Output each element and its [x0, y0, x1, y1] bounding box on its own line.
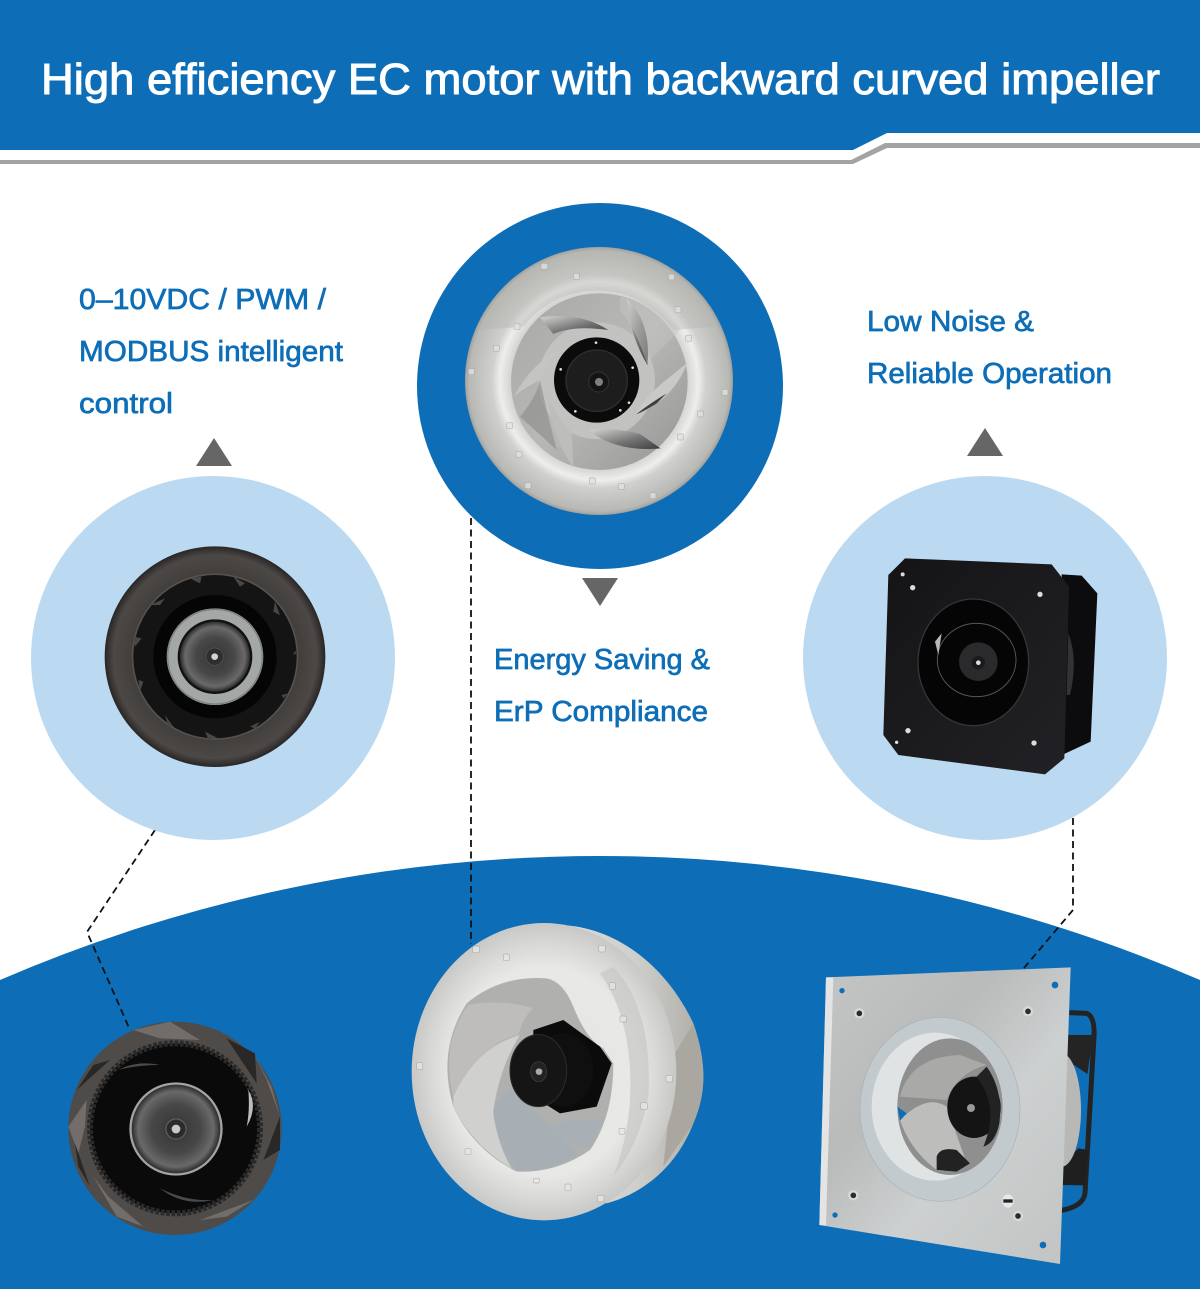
header band: [0, 0, 1200, 150]
text: energy saving: ErP Compliance: [494, 696, 708, 728]
icon: silver impeller front view: [465, 247, 733, 515]
text: low noise: [867, 306, 1112, 390]
motor hub: [129, 1082, 223, 1176]
product: black impeller, bottom left: [68, 1022, 282, 1235]
icon: dark impeller, intake side: [105, 546, 325, 767]
text: control modes: MODBUS intelligent: [79, 336, 343, 368]
light blue circle: [31, 476, 395, 840]
bottom blue arc panel: [0, 856, 1200, 1289]
panel: intelligent control, left fan: [31, 284, 395, 840]
light blue circle: [803, 476, 1167, 840]
text: low noise: Low Noise &: [867, 306, 1034, 338]
outer blade rim: [68, 1022, 282, 1235]
panel: low noise, right fan: [803, 306, 1167, 840]
header grey rule: [0, 143, 1200, 164]
front shroud: [412, 923, 676, 1220]
text: energy saving: Energy Saving &: [494, 644, 710, 676]
centre blue circle: [417, 203, 783, 569]
product: silver square-plate fan, bottom right: [819, 967, 1094, 1264]
rear frame and handle: [1060, 1013, 1094, 1211]
text: low noise: Reliable Operation: [867, 358, 1112, 390]
opening: [447, 978, 613, 1172]
panel: energy saving, top centre fan: [417, 203, 783, 728]
arrow: up: [967, 428, 1003, 456]
text: control modes: [79, 284, 343, 420]
icon: black square-plate fan: [883, 558, 1097, 774]
connector: left circle to black fan: [87, 830, 155, 1030]
impeller opening: [897, 1038, 1003, 1175]
connector: right circle to square fan: [1024, 818, 1073, 968]
plate: [819, 967, 1071, 1264]
motor: [533, 1020, 612, 1113]
title: High efficiency EC motor with backward curved impeller: [41, 55, 1160, 104]
inlet ring: [860, 1017, 1020, 1201]
arrow: up: [196, 438, 232, 466]
text: control modes: control: [79, 388, 173, 420]
perforated ring: [90, 1043, 260, 1213]
text: energy saving: [494, 644, 710, 728]
connector: centre circle to silver fan: [470, 518, 472, 944]
rear drum: [533, 925, 703, 1203]
arrow: down: [582, 578, 618, 606]
product: silver impeller, bottom centre: [412, 923, 703, 1220]
text: control modes: 0–10VDC / PWM /: [79, 284, 327, 316]
bolts and holes: [849, 1007, 1032, 1220]
